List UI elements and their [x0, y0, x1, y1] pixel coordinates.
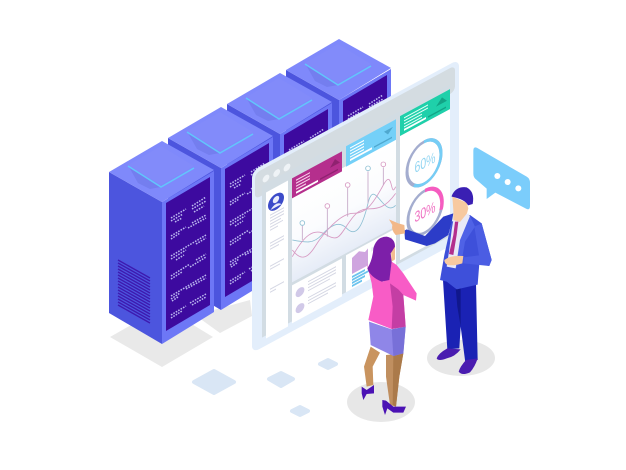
woman figure: [362, 237, 417, 415]
server rack 4: [286, 39, 391, 242]
server rack 3: [227, 73, 332, 276]
floor shadow: server racks: [110, 300, 252, 367]
chat bubble icon: [473, 147, 530, 209]
legs: [364, 347, 380, 387]
board frame: [252, 59, 459, 353]
skirt: [369, 322, 406, 356]
hair: [367, 237, 395, 282]
floor shadow: woman: [347, 382, 415, 422]
pink header card: [292, 151, 342, 198]
pointing sleeve: [404, 213, 453, 246]
face: [391, 246, 395, 262]
sidebar text lines: [270, 208, 284, 292]
server rack 1: [109, 141, 214, 344]
jacket: [440, 215, 492, 289]
line chart: [292, 162, 396, 257]
blue header card: [346, 119, 396, 167]
floor shadow: man: [427, 340, 495, 376]
pointing hand: [389, 219, 405, 235]
dashboard board: [252, 59, 459, 353]
server rack 2: [168, 107, 273, 310]
chart background: [292, 139, 396, 282]
info card right: [346, 228, 396, 292]
gauge 30%: [408, 181, 442, 242]
right column: [400, 109, 450, 260]
sleeve right: [463, 223, 492, 266]
green header card: [400, 89, 450, 136]
upper body: [389, 187, 492, 289]
gauge 60%: [407, 133, 441, 193]
hair: [452, 187, 473, 205]
shoes: [362, 385, 374, 400]
lapel: [456, 216, 475, 268]
jacket: [367, 262, 417, 329]
head: [452, 197, 468, 222]
sidebar: [266, 181, 288, 338]
gauge 60%: 60%: [414, 149, 436, 177]
floor tiles: [194, 360, 336, 415]
trousers and shoes: [437, 275, 478, 374]
man figure: [389, 187, 492, 374]
info card left: [292, 258, 342, 323]
tie: [449, 222, 458, 255]
gauge 30%: 30%: [414, 198, 436, 226]
holding hand: [444, 256, 463, 265]
shirt: [447, 213, 470, 268]
avatar icon: [268, 189, 284, 214]
jacket shade: [390, 283, 406, 329]
board header strip: [255, 65, 455, 199]
browser dots: [263, 162, 290, 184]
